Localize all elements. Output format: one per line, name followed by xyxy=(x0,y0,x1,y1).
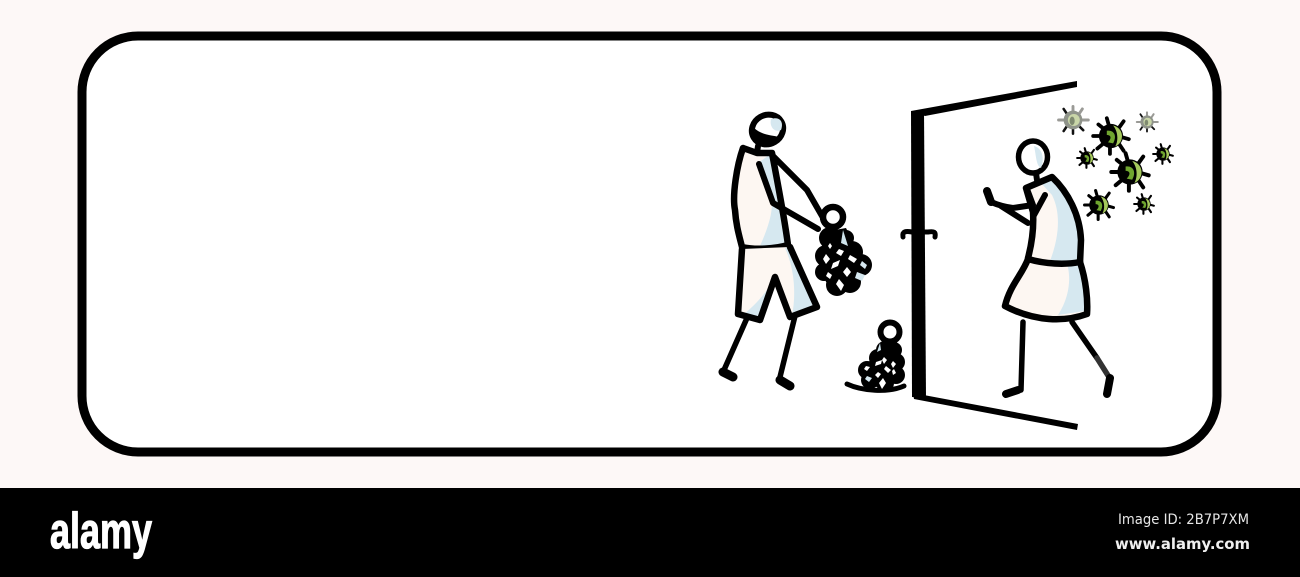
man legs xyxy=(724,316,795,377)
icon: carried net bag xyxy=(815,207,872,296)
virus 4 small xyxy=(1077,148,1097,168)
virus 2 large xyxy=(1093,118,1129,154)
man feet xyxy=(723,372,790,386)
woman torso xyxy=(1026,177,1081,263)
man head xyxy=(746,109,789,153)
door xyxy=(903,81,1078,430)
woman head xyxy=(1018,141,1048,180)
woman legs xyxy=(1021,322,1109,390)
virus 6 large xyxy=(1111,153,1149,191)
woman arms xyxy=(991,189,1045,223)
virus 8 small xyxy=(1134,194,1154,214)
virus 1 grey xyxy=(1059,106,1088,134)
rounded frame panel xyxy=(82,36,1217,452)
virus 7 medium xyxy=(1085,191,1113,219)
figure: woman at the door xyxy=(987,141,1110,394)
alamy logo: alamy xyxy=(50,503,152,559)
watermark footer bar xyxy=(0,488,1300,577)
door frame top edge xyxy=(911,81,1077,116)
man shorts xyxy=(738,247,817,320)
virus 3 grey small xyxy=(1137,112,1158,132)
woman skirt xyxy=(1005,259,1087,319)
man arms xyxy=(759,155,822,229)
woman feet xyxy=(1006,378,1110,394)
figure: man carrying net bag xyxy=(723,109,822,386)
virus 5 small xyxy=(1153,144,1173,164)
website: www.alamy.com xyxy=(1115,535,1250,553)
door frame bottom edge xyxy=(913,393,1078,430)
icon: virus cloud xyxy=(1059,106,1173,219)
woman hand xyxy=(987,191,991,202)
image id: Image ID: 2B7P7XM xyxy=(1118,512,1249,528)
door post xyxy=(911,111,926,398)
icon: net bag on floor xyxy=(847,322,905,392)
door handle xyxy=(903,232,935,237)
man torso xyxy=(734,148,788,249)
